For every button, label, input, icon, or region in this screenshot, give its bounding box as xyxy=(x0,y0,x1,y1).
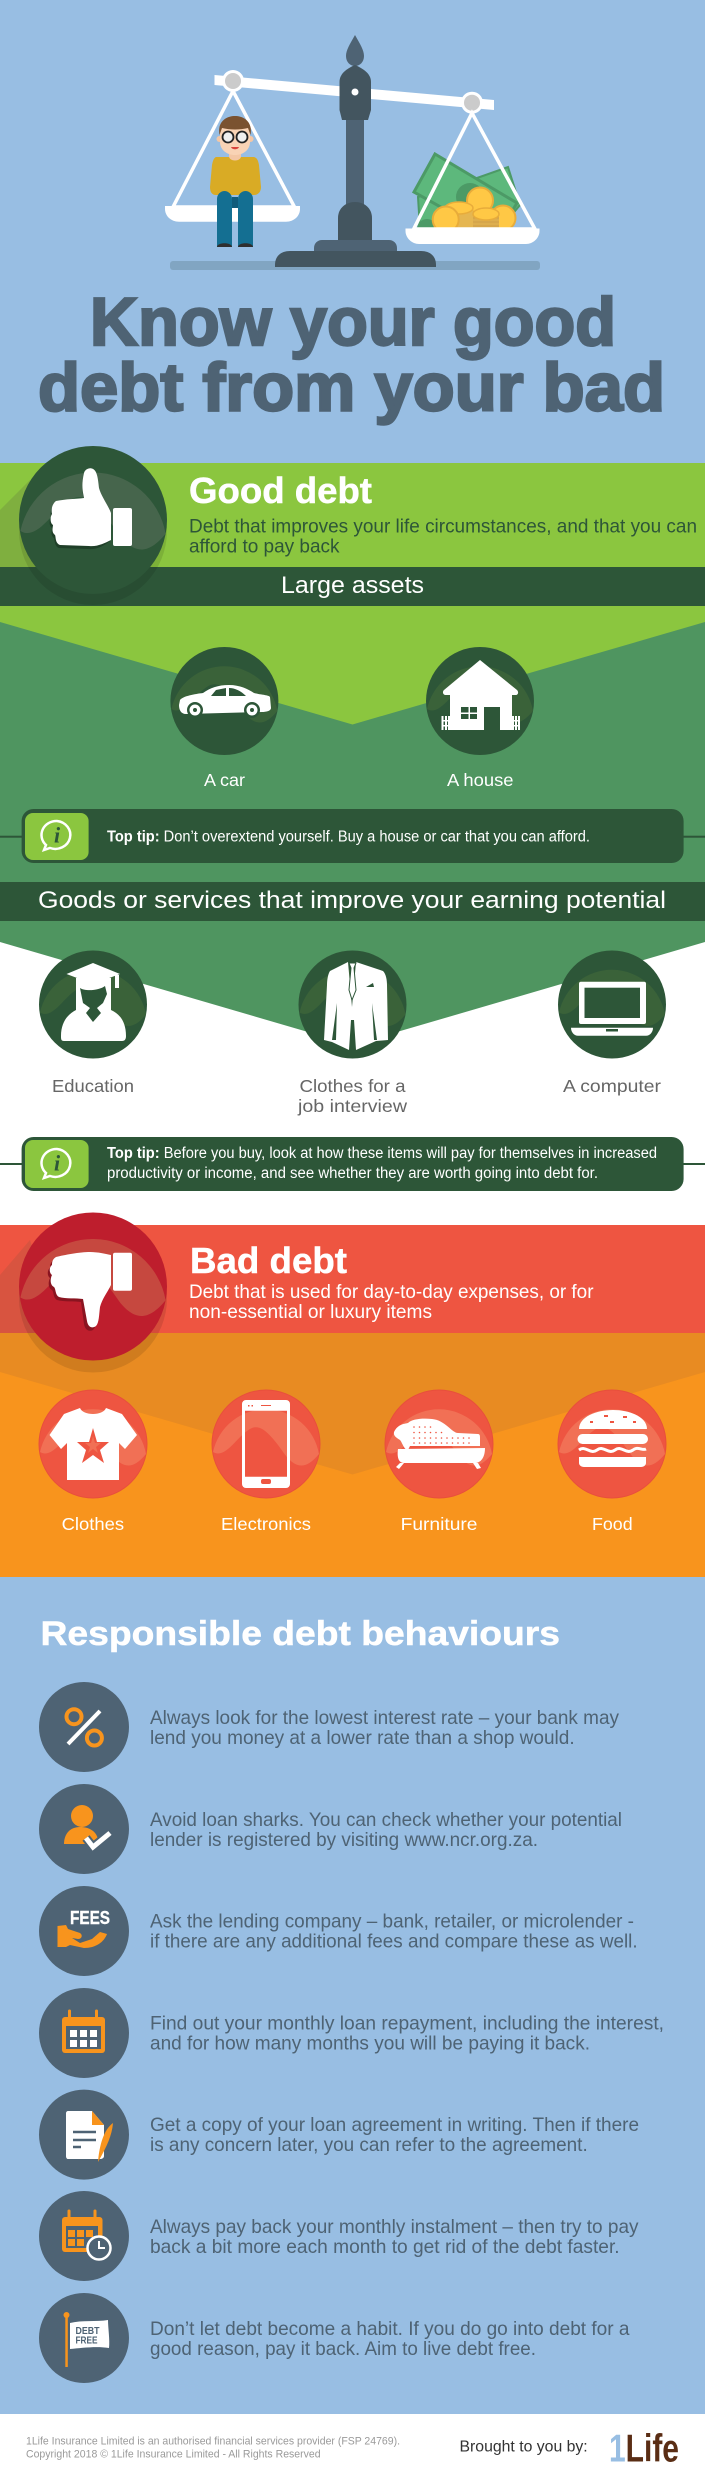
panel: bad debt xyxy=(0,1212,705,1577)
text: good debt description: Debt that improves your life circumstances, and that you can xyxy=(189,516,697,538)
icon: verified person xyxy=(39,1784,129,1874)
icon: computer xyxy=(558,950,666,1058)
text: top tip 1: Top tip: Don’t overextend yourself. Buy a house or car that you can afford. xyxy=(107,829,590,846)
icon: food xyxy=(558,1390,666,1498)
text: loan sharks: Avoid loan sharks. You can check whether your potential xyxy=(150,1809,622,1831)
text: lowest interest rate: lend you money at a lower rate than a shop would. xyxy=(150,1727,575,1749)
title: debt from your bad xyxy=(38,350,665,426)
icon: electronics xyxy=(212,1390,320,1498)
label: clothes for a job interview xyxy=(297,1076,407,1116)
text: top tip 2: productivity or income, and see whether they are worth going into debt for. xyxy=(107,1165,598,1182)
text: monthly instalment xyxy=(150,2216,639,2258)
text: debt free xyxy=(150,2318,630,2360)
text: loan agreement xyxy=(150,2114,639,2156)
icon: info bubble xyxy=(41,821,70,850)
text: loan sharks: lender is registered by visiting www.ncr.org.za. xyxy=(150,1829,538,1851)
callout: top tip 2 xyxy=(0,1137,705,1191)
footer xyxy=(0,2414,705,2485)
label: a car: A car xyxy=(204,770,245,790)
icon: debt free flag: FREE xyxy=(76,2336,98,2346)
text: monthly repayment: Find out your monthly loan repayment, including the interest, xyxy=(150,2012,664,2034)
text: lowest interest rate: Always look for the lowest interest rate – your bank may xyxy=(150,1707,619,1729)
text: good debt description: afford to pay back xyxy=(189,536,340,558)
icon: suit xyxy=(298,950,406,1058)
icon: fees: FEES xyxy=(70,1908,110,1928)
label: education: Education xyxy=(52,1076,134,1096)
panel: responsible debt behaviours xyxy=(39,1615,664,2383)
text: monthly repayment xyxy=(150,2012,664,2054)
logo: 1Life: 1Life xyxy=(609,2428,679,2471)
icon: clothes xyxy=(39,1390,147,1498)
label: clothes for a job interview: job interview xyxy=(297,1096,407,1116)
label: electronics: Electronics xyxy=(221,1514,311,1534)
text: top tip 2: Top tip: Before you buy, look at how these items will pay for themselves in increased xyxy=(107,1145,657,1162)
subheading: goods or services: Goods or services that improve your earning potential xyxy=(38,887,666,914)
heading: responsible debt behaviours: Responsible debt behaviours xyxy=(40,1615,560,1653)
text: debt free: good reason, pay it back. Aim to live debt free. xyxy=(150,2338,536,2360)
text: legal disclaimer: 1Life Insurance Limited is an authorised financial services provider (FSP 24769). xyxy=(26,2435,400,2447)
icon: percent xyxy=(39,1682,129,1772)
label: a house: A house xyxy=(447,770,514,790)
text: monthly instalment: Always pay back your monthly instalment – then try to pay xyxy=(150,2216,639,2238)
icon: info bubble xyxy=(41,1149,70,1178)
panel: good debt xyxy=(0,446,705,882)
text: bad debt description: non-essential or luxury items xyxy=(189,1301,432,1323)
title: Know your good xyxy=(90,284,616,360)
text: loan agreement: is any concern later, you can refer to the agreement. xyxy=(150,2134,588,2156)
heading: good debt: Good debt xyxy=(189,470,372,511)
callout: top tip 1 xyxy=(0,809,705,863)
text: good debt description xyxy=(189,516,697,558)
subheading: large assets: Large assets xyxy=(281,572,424,599)
icon: calendar and clock xyxy=(39,2191,129,2281)
text: brought to you by: Brought to you by: xyxy=(460,2439,588,2456)
text: legal disclaimer xyxy=(26,2435,400,2461)
text: loan agreement: Get a copy of your loan agreement in writing. Then if there xyxy=(150,2114,639,2136)
heading: bad debt: Bad debt xyxy=(190,1240,347,1281)
text: additional fees: if there are any additional fees and compare these as well. xyxy=(150,1931,638,1953)
text: bad debt description xyxy=(189,1281,594,1323)
text: monthly repayment: and for how many months you will be paying it back. xyxy=(150,2032,590,2054)
text: monthly instalment: back a bit more each month to get rid of the debt faster. xyxy=(150,2236,620,2258)
icon: fees xyxy=(39,1886,129,1976)
icon: thumbs up xyxy=(19,446,167,605)
icon: education xyxy=(39,950,147,1058)
text: lowest interest rate xyxy=(150,1707,619,1749)
text: bad debt description: Debt that is used for day-to-day expenses, or for xyxy=(189,1281,594,1303)
icon: info bubble: i xyxy=(54,1150,61,1176)
icon: thumbs down xyxy=(19,1212,167,1372)
icon: debt free flag xyxy=(39,2293,129,2383)
icon: debt free flag: DEBT xyxy=(76,2326,100,2337)
label: furniture: Furniture xyxy=(401,1514,478,1534)
panel: goods or services xyxy=(0,882,705,1225)
text: legal disclaimer: Copyright 2018 © 1Life Insurance Limited - All Rights Reserved xyxy=(26,2449,321,2461)
label: a computer: A computer xyxy=(563,1076,661,1096)
icon: agreement document xyxy=(39,2090,129,2180)
text: debt free: Don’t let debt become a habit. If you do go into debt for a xyxy=(150,2318,630,2340)
icon: furniture xyxy=(385,1390,493,1498)
icon: man sitting on scale xyxy=(210,116,261,247)
label: clothes: Clothes xyxy=(62,1514,124,1534)
text: loan sharks xyxy=(150,1809,622,1851)
label: clothes for a job interview: Clothes for a xyxy=(300,1076,406,1096)
text: top tip 2 xyxy=(107,1145,657,1182)
icon: info bubble: i xyxy=(54,822,61,848)
icon: house xyxy=(426,647,534,755)
icon: calendar xyxy=(39,1988,129,2078)
text: additional fees xyxy=(150,1911,638,1953)
illustration: balance scale xyxy=(165,35,540,270)
icon: money and coins xyxy=(414,154,520,239)
text: additional fees: Ask the lending company – bank, retailer, or microlender - xyxy=(150,1911,634,1933)
icon: car xyxy=(170,647,278,755)
title xyxy=(38,284,665,426)
label: food: Food xyxy=(592,1514,633,1534)
